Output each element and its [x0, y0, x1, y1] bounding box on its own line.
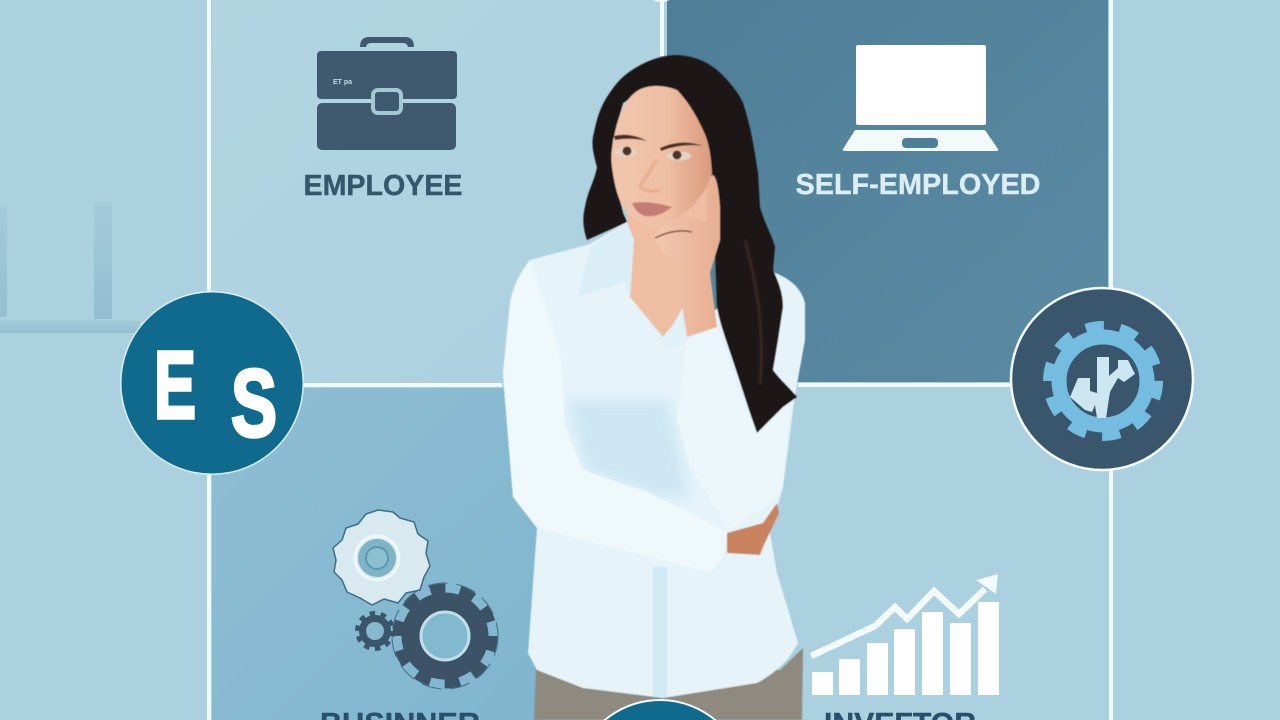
hair	[583, 55, 797, 433]
lips	[632, 202, 672, 216]
icon: briefcase	[317, 37, 457, 150]
badge: E S	[120, 291, 304, 475]
panel: employee	[212, 0, 659, 382]
faded skyline	[0, 202, 140, 333]
icon: blue gear	[1048, 326, 1158, 436]
panel: business	[212, 388, 542, 720]
left sleeve	[503, 260, 727, 572]
trousers	[534, 648, 803, 720]
woman	[503, 55, 805, 720]
icon: light gear	[333, 510, 430, 605]
icon: growth chart	[811, 574, 999, 695]
top circle edge	[643, 0, 679, 2]
shirt body	[503, 222, 805, 698]
badge: gear	[1011, 288, 1193, 470]
collar lapel	[628, 297, 687, 348]
nose shadow	[640, 160, 660, 191]
label: employee: EMPLOYEE	[304, 170, 462, 202]
eyes	[615, 148, 637, 156]
panel: self-employed	[667, 0, 1108, 382]
shirt shading	[567, 400, 690, 500]
hand at chin	[653, 175, 720, 337]
lower hand	[727, 503, 779, 555]
badge: E S: S	[231, 350, 277, 457]
label: self-employed: SELF-EMPLOYED	[796, 169, 1040, 201]
icon: small gear	[358, 614, 392, 648]
icon: dark gear	[392, 583, 498, 689]
neck	[627, 178, 713, 337]
shirt placket	[653, 567, 667, 697]
face	[611, 86, 712, 228]
icon: laptop	[843, 45, 998, 151]
icon: briefcase: ET pa	[333, 79, 352, 86]
finger line	[655, 231, 692, 238]
grid lines	[207, 0, 1113, 720]
panel: investor	[790, 388, 1108, 720]
badge: bottom	[574, 700, 746, 720]
hair highlight	[745, 240, 761, 385]
right sleeve	[677, 327, 790, 530]
badge: E S: E	[154, 332, 196, 439]
eyebrows	[614, 135, 703, 151]
collar	[578, 222, 634, 300]
